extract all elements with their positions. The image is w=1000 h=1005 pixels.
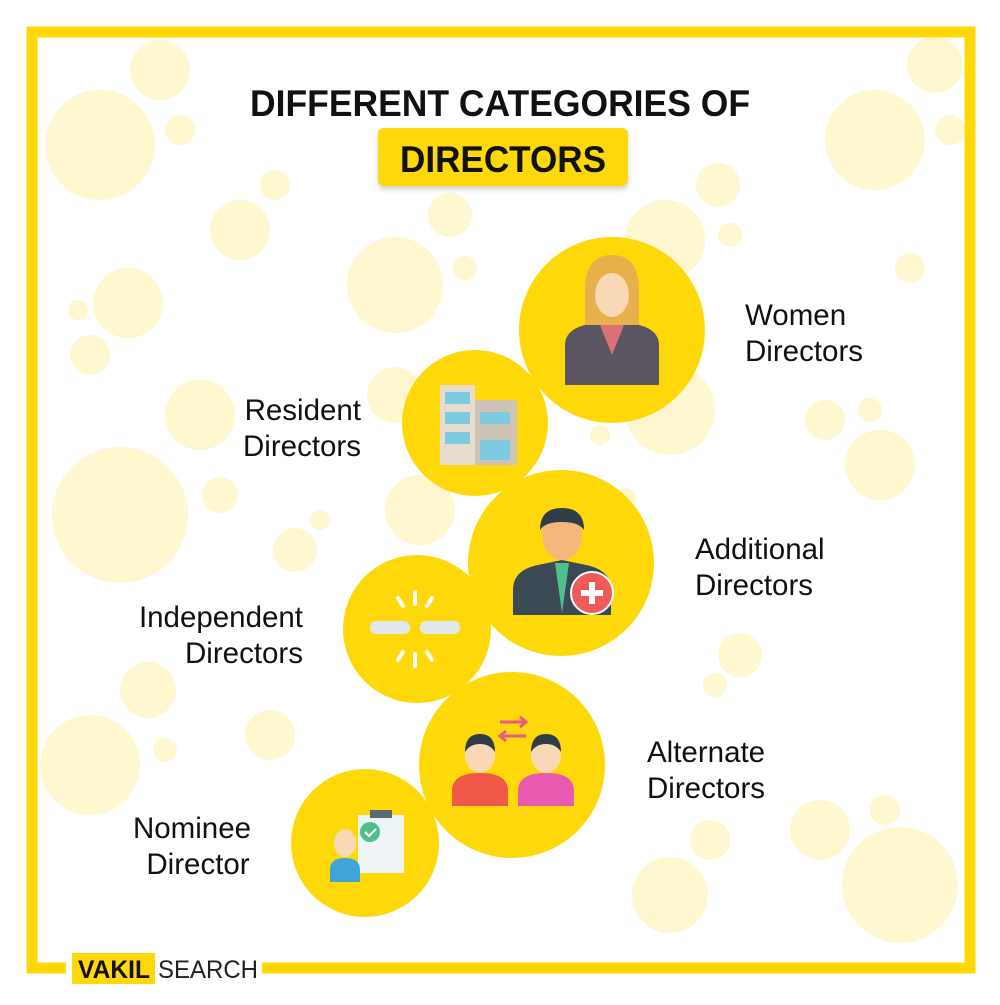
circle: alternate directors bbox=[419, 672, 605, 858]
circle: additional directors bbox=[468, 470, 654, 656]
logo bbox=[72, 953, 258, 984]
label: resident directors: Directors bbox=[243, 430, 361, 463]
label: women directors: Directors bbox=[745, 335, 863, 368]
circle: independent directors bbox=[343, 555, 491, 703]
label: nominee director: Director bbox=[146, 848, 250, 881]
label: independent directors: Directors bbox=[185, 637, 303, 670]
label: additional directors: Directors bbox=[695, 569, 813, 602]
label: additional directors: Additional bbox=[695, 533, 825, 566]
label: women directors: Women bbox=[745, 299, 846, 332]
circle: women directors bbox=[519, 237, 705, 423]
logo: SEARCH bbox=[158, 956, 258, 984]
label: nominee director: Nominee bbox=[133, 812, 251, 845]
labels bbox=[133, 299, 863, 881]
label: resident directors: Resident bbox=[245, 394, 361, 427]
label: alternate directors: Alternate bbox=[647, 736, 765, 769]
title: DIRECTORS bbox=[400, 139, 606, 180]
circle: nominee director bbox=[291, 769, 439, 917]
label: independent directors: Independent bbox=[139, 601, 303, 634]
logo: VAKIL bbox=[78, 956, 150, 984]
label: alternate directors: Directors bbox=[647, 772, 765, 805]
title: DIFFERENT CATEGORIES OF bbox=[250, 83, 750, 124]
circle: resident directors bbox=[402, 350, 548, 496]
title bbox=[250, 83, 750, 186]
